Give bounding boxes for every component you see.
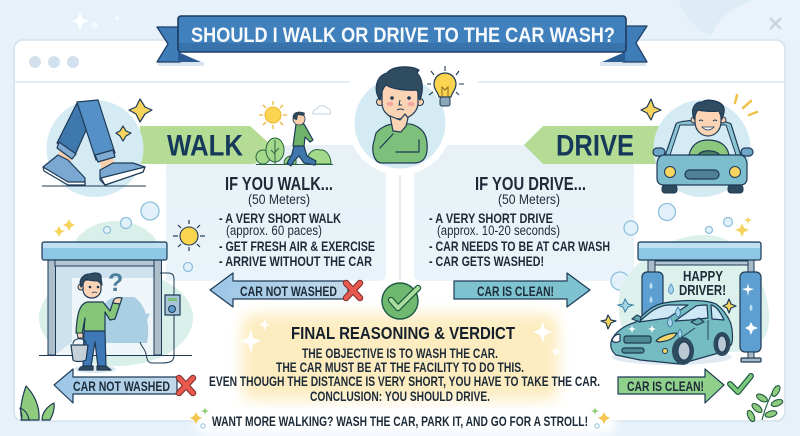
panel: if you drive: - A VERY SHORT DRIVE — [429, 210, 553, 226]
final reasoning and verdict: EVEN THOUGH THE DISTANCE IS VERY SHORT, YOU HAVE TO TAKE THE CAR. — [209, 374, 600, 389]
car wash: clean car with brushes: HAPPY — [683, 268, 723, 285]
panel: if you walk: - A VERY SHORT WALK — [219, 210, 341, 226]
arrow: car not washed (bottom): CAR NOT WASHED — [73, 379, 170, 394]
panel: if you walk: (50 Meters) — [248, 192, 310, 207]
tab: drive — [524, 126, 662, 164]
arrow: car is clean (bottom) — [618, 369, 724, 403]
icon: green check (bottom) — [730, 376, 751, 392]
final reasoning and verdict: FINAL REASONING & VERDICT — [291, 323, 515, 343]
footer message: WANT MORE WALKING? WASH THE CAR, PARK IT, AND GO FOR A STROLL! — [212, 414, 588, 429]
panel: if you drive: (approx. 10-20 seconds) — [437, 223, 560, 238]
arrow: car not washed (bottom) — [54, 369, 177, 403]
icon: happy driver in car — [653, 95, 757, 197]
icon: plant, right — [746, 384, 784, 423]
arrow: car not washed (middle): CAR NOT WASHED — [240, 284, 337, 299]
tab: drive: DRIVE — [556, 130, 634, 162]
arrow: car not washed (middle) — [210, 273, 348, 307]
tab: walk — [140, 126, 270, 164]
car wash: walker without car — [39, 221, 193, 373]
bubbles and sparkles, left — [54, 202, 192, 272]
bubbles and sparkles, right — [611, 204, 752, 290]
panel: if you walk: - GET FRESH AIR & EXERCISE — [219, 238, 375, 254]
panel: if you drive: - CAR GETS WASHED! — [429, 253, 544, 269]
panel: if you drive: - CAR NEEDS TO BE AT CAR WASH — [429, 238, 610, 254]
final reasoning and verdict — [209, 323, 600, 404]
icon: sparkles near legs — [116, 99, 152, 141]
panel: if you drive: (50 Meters) — [498, 192, 560, 207]
verdict glow — [242, 314, 558, 400]
icon: sun in walk panel — [173, 220, 205, 251]
panel: if you walk: (approx. 60 paces) — [226, 223, 322, 238]
title banner — [157, 16, 647, 66]
final reasoning and verdict: CONCLUSION: YOU SHOULD DRIVE. — [310, 389, 490, 404]
verdict sparkles — [240, 319, 561, 357]
panel: if you drive — [414, 145, 634, 281]
icon: walking legs — [42, 100, 146, 197]
icon: plant, left — [20, 386, 54, 420]
arrow: car is clean (bottom): CAR IS CLEAN! — [627, 379, 704, 394]
icon: green check badge — [382, 283, 418, 319]
icon: close window — [770, 18, 781, 29]
car wash: clean car with brushes — [601, 235, 769, 365]
icon: walker with sun and bushes — [256, 101, 333, 166]
title banner: SHOULD I WALK OR DRIVE TO THE CAR WASH? — [191, 24, 615, 47]
icon: thinking person with light bulb — [348, 66, 464, 175]
tab: walk: WALK — [167, 130, 243, 162]
icon: red x (middle) — [346, 283, 360, 298]
footer sparkles — [190, 407, 610, 428]
final reasoning and verdict: THE OBJECTIVE IS TO WASH THE CAR. — [302, 346, 498, 361]
car wash: walker without car: ? — [108, 269, 123, 297]
panel: if you drive: IF YOU DRIVE... — [475, 174, 586, 194]
panel: if you walk — [166, 145, 386, 281]
panel: if you walk: IF YOU WALK... — [225, 174, 333, 194]
footer glow — [195, 412, 615, 434]
arrow: car is clean (middle): CAR IS CLEAN! — [477, 284, 554, 299]
center divider — [399, 175, 401, 280]
arrow: car is clean (middle) — [454, 273, 590, 307]
final reasoning and verdict: THE CAR MUST BE AT THE FACILITY TO DO THIS. — [276, 360, 524, 375]
icon: red x (bottom) — [179, 378, 193, 393]
car wash: clean car with brushes: DRIVER! — [679, 282, 726, 299]
icon: sparkle near driver — [641, 99, 661, 120]
panel: if you walk: - ARRIVE WITHOUT THE CAR — [219, 253, 372, 269]
